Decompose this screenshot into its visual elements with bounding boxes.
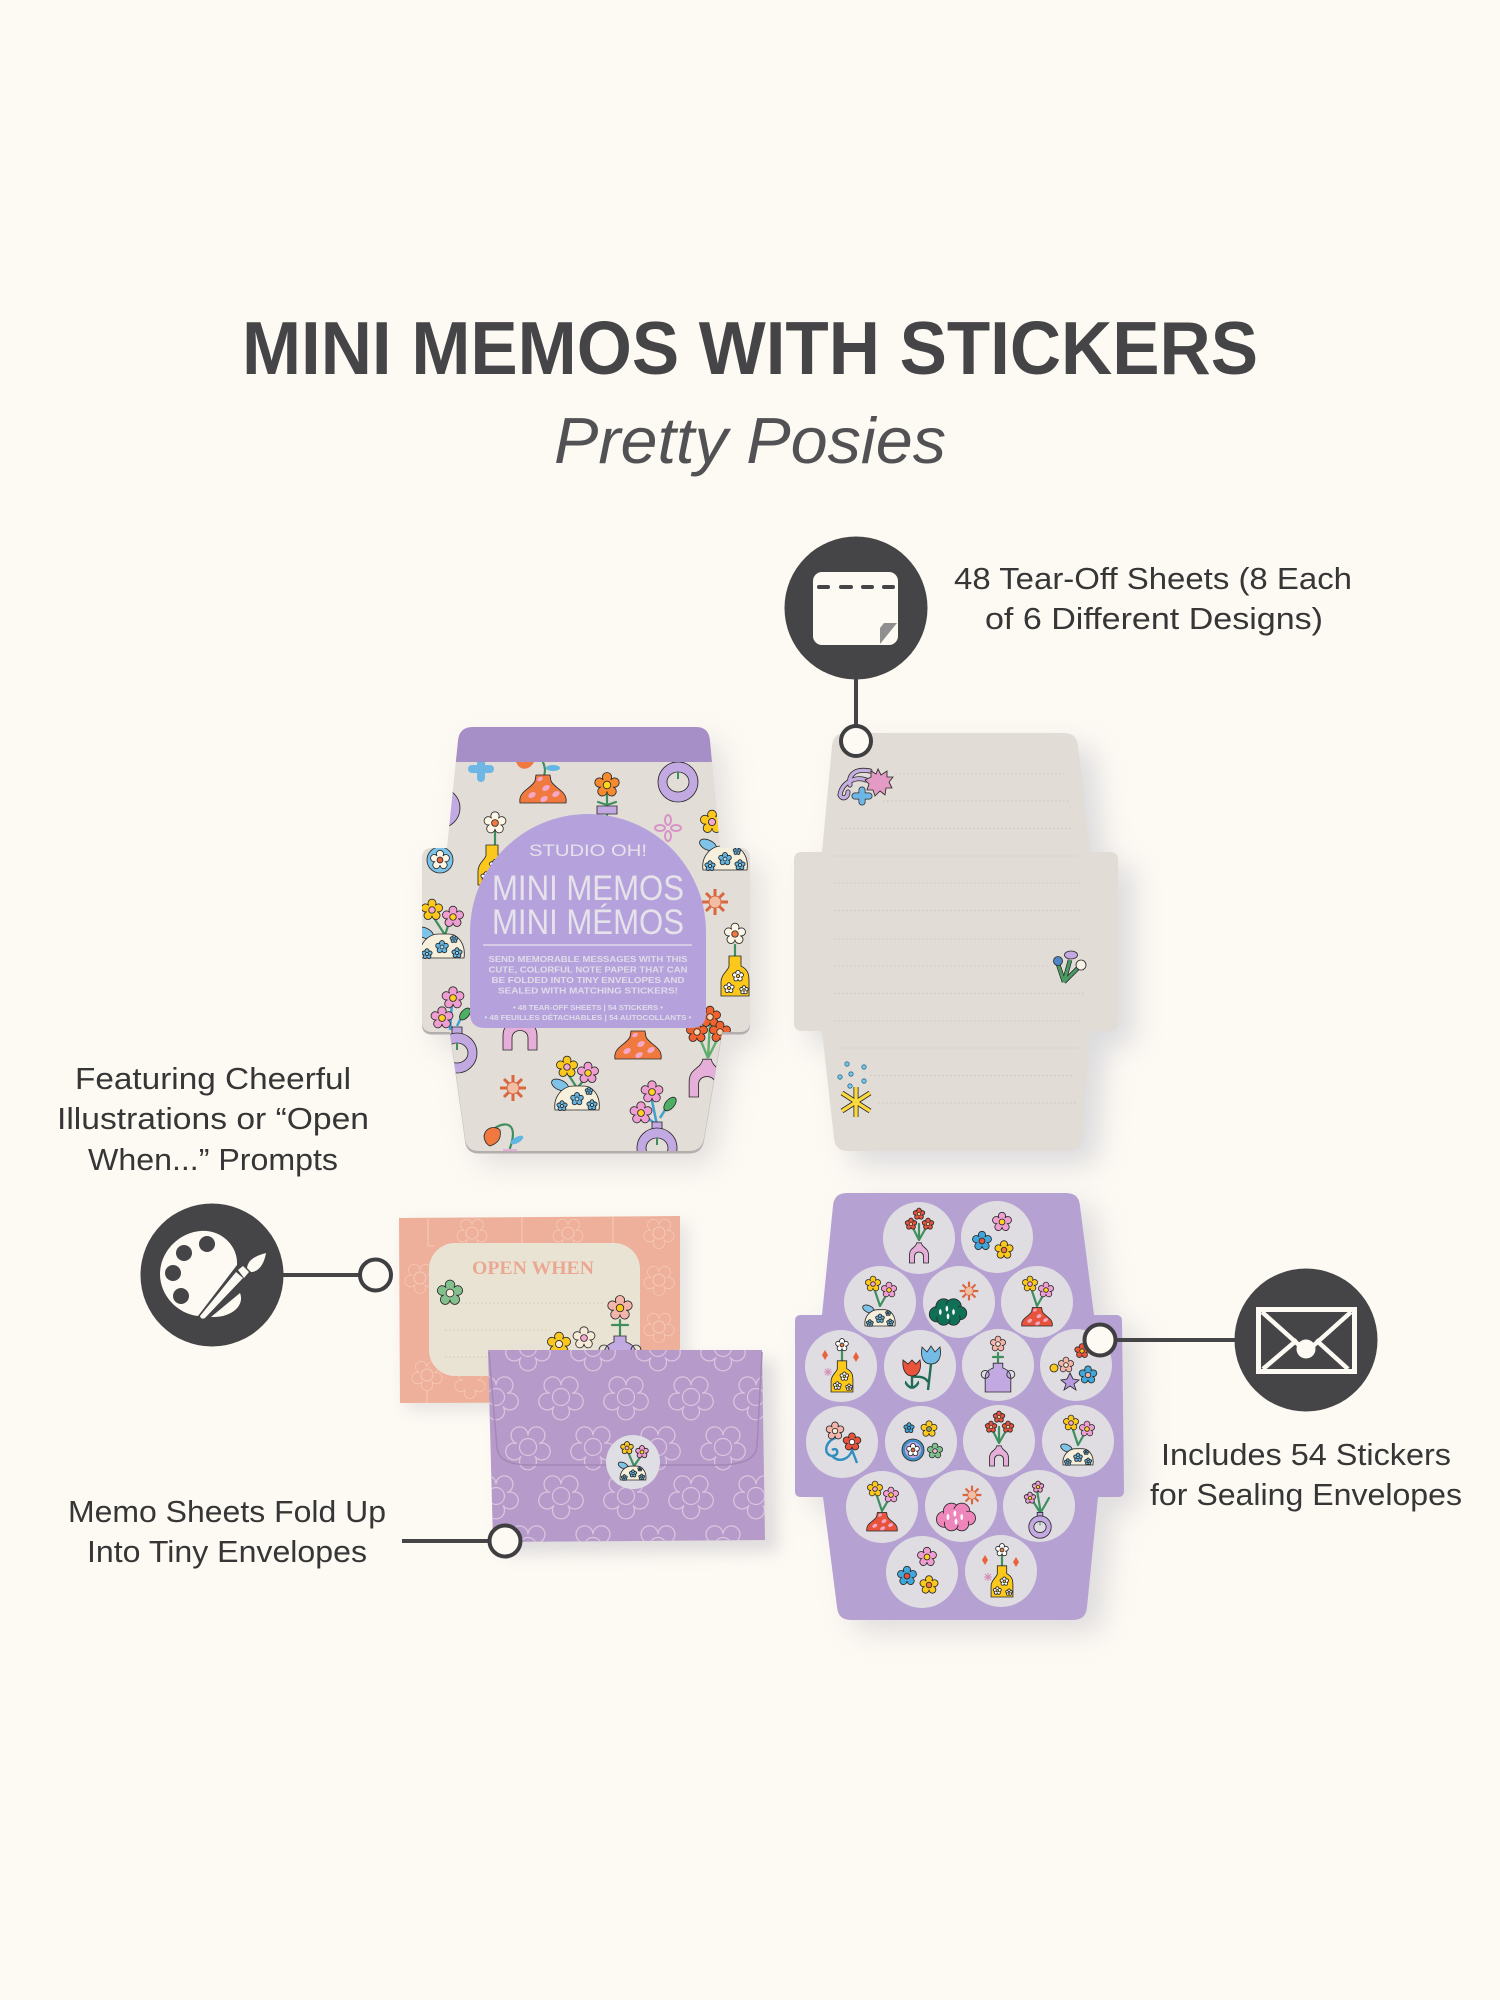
node: [490, 1526, 520, 1556]
callout: tear-off sheets: [784, 536, 1352, 756]
memo arch label: [470, 814, 706, 1028]
envelope flap: [489, 1352, 762, 1465]
memo arch label: MINI MÉMOS: [492, 903, 684, 942]
memo illustrations: [415, 725, 749, 1168]
icon: envelope: [1234, 1268, 1378, 1412]
doodle: dots and yellow burst: [838, 1062, 870, 1117]
sticker row 3: [805, 1329, 1112, 1402]
callout: cheerful illustrations: [57, 1061, 391, 1346]
connector: [854, 670, 858, 726]
memo arch label: MINI MEMOS: [492, 869, 684, 908]
callout: sealing stickers: [1084, 1268, 1462, 1512]
node: [841, 726, 871, 756]
memo arch label: • 48 FEUILLES DÉTACHABLES | 54 AUTOCOLLANTS •: [484, 1013, 692, 1022]
connector: [1115, 1338, 1240, 1342]
label line 2: Into Tiny Envelopes: [87, 1534, 367, 1569]
product: open-when card: [399, 1216, 688, 1410]
memo arch label: SEND MEMORABLE MESSAGES WITH THIS: [488, 954, 688, 964]
label line 2: of 6 Different Designs): [985, 601, 1323, 636]
label line 2: Illustrations or “Open: [57, 1101, 369, 1136]
product: memo sheet back with dotted lines: [794, 733, 1134, 1165]
sticker row 4: [806, 1405, 1114, 1478]
label line 2: for Sealing Envelopes: [1150, 1477, 1462, 1512]
label: Featuring Cheerful: [75, 1061, 351, 1096]
icon: tear-off sheet: [784, 536, 928, 680]
open when heading: OPEN WHEN: [472, 1259, 595, 1279]
doodle: swirls and star: [840, 769, 893, 802]
sticker seal: [606, 1435, 660, 1489]
label: Memo Sheets Fold Up: [68, 1494, 386, 1529]
product: purple envelope with sticker seal: [488, 1350, 778, 1554]
dotted writing lines: [834, 774, 1085, 1103]
title: MINI MEMOS WITH STICKERS: [242, 306, 1258, 390]
card flower pattern: [405, 1217, 674, 1403]
icon: paint palette: [140, 1204, 284, 1346]
doodle: stems: [1054, 951, 1086, 982]
node: [1084, 1324, 1116, 1356]
memo arch label: • 48 TEAR-OFF SHEETS | 54 STICKERS •: [513, 1005, 664, 1012]
label: Includes 54 Stickers: [1161, 1437, 1451, 1472]
label line 3: When...” Prompts: [88, 1142, 338, 1177]
label: 48 Tear-Off Sheets (8 Each: [954, 561, 1352, 596]
node: [360, 1260, 391, 1290]
callout: fold up envelopes: [68, 1494, 520, 1569]
memo arch label: CUTE, COLORFUL NOTE PAPER THAT CAN: [488, 964, 688, 974]
product: memo pad front: [415, 725, 762, 1168]
sticker row 1: [883, 1201, 1033, 1274]
product: sticker sheet: [795, 1193, 1140, 1632]
sticker row 5: [846, 1470, 1075, 1543]
connector: [282, 1273, 360, 1277]
connector: [402, 1539, 490, 1543]
memo arch label: SEALED WITH MATCHING STICKERS!: [498, 986, 678, 996]
subtitle: Pretty Posies: [554, 404, 946, 477]
memo arch label: STUDIO OH!: [529, 842, 647, 860]
sticker row 2: [844, 1266, 1073, 1338]
memo arch label: BE FOLDED INTO TINY ENVELOPES AND: [492, 975, 684, 985]
sticker row 6: [886, 1535, 1037, 1608]
card flowers: [437, 1280, 641, 1372]
memo top band: [455, 725, 717, 762]
